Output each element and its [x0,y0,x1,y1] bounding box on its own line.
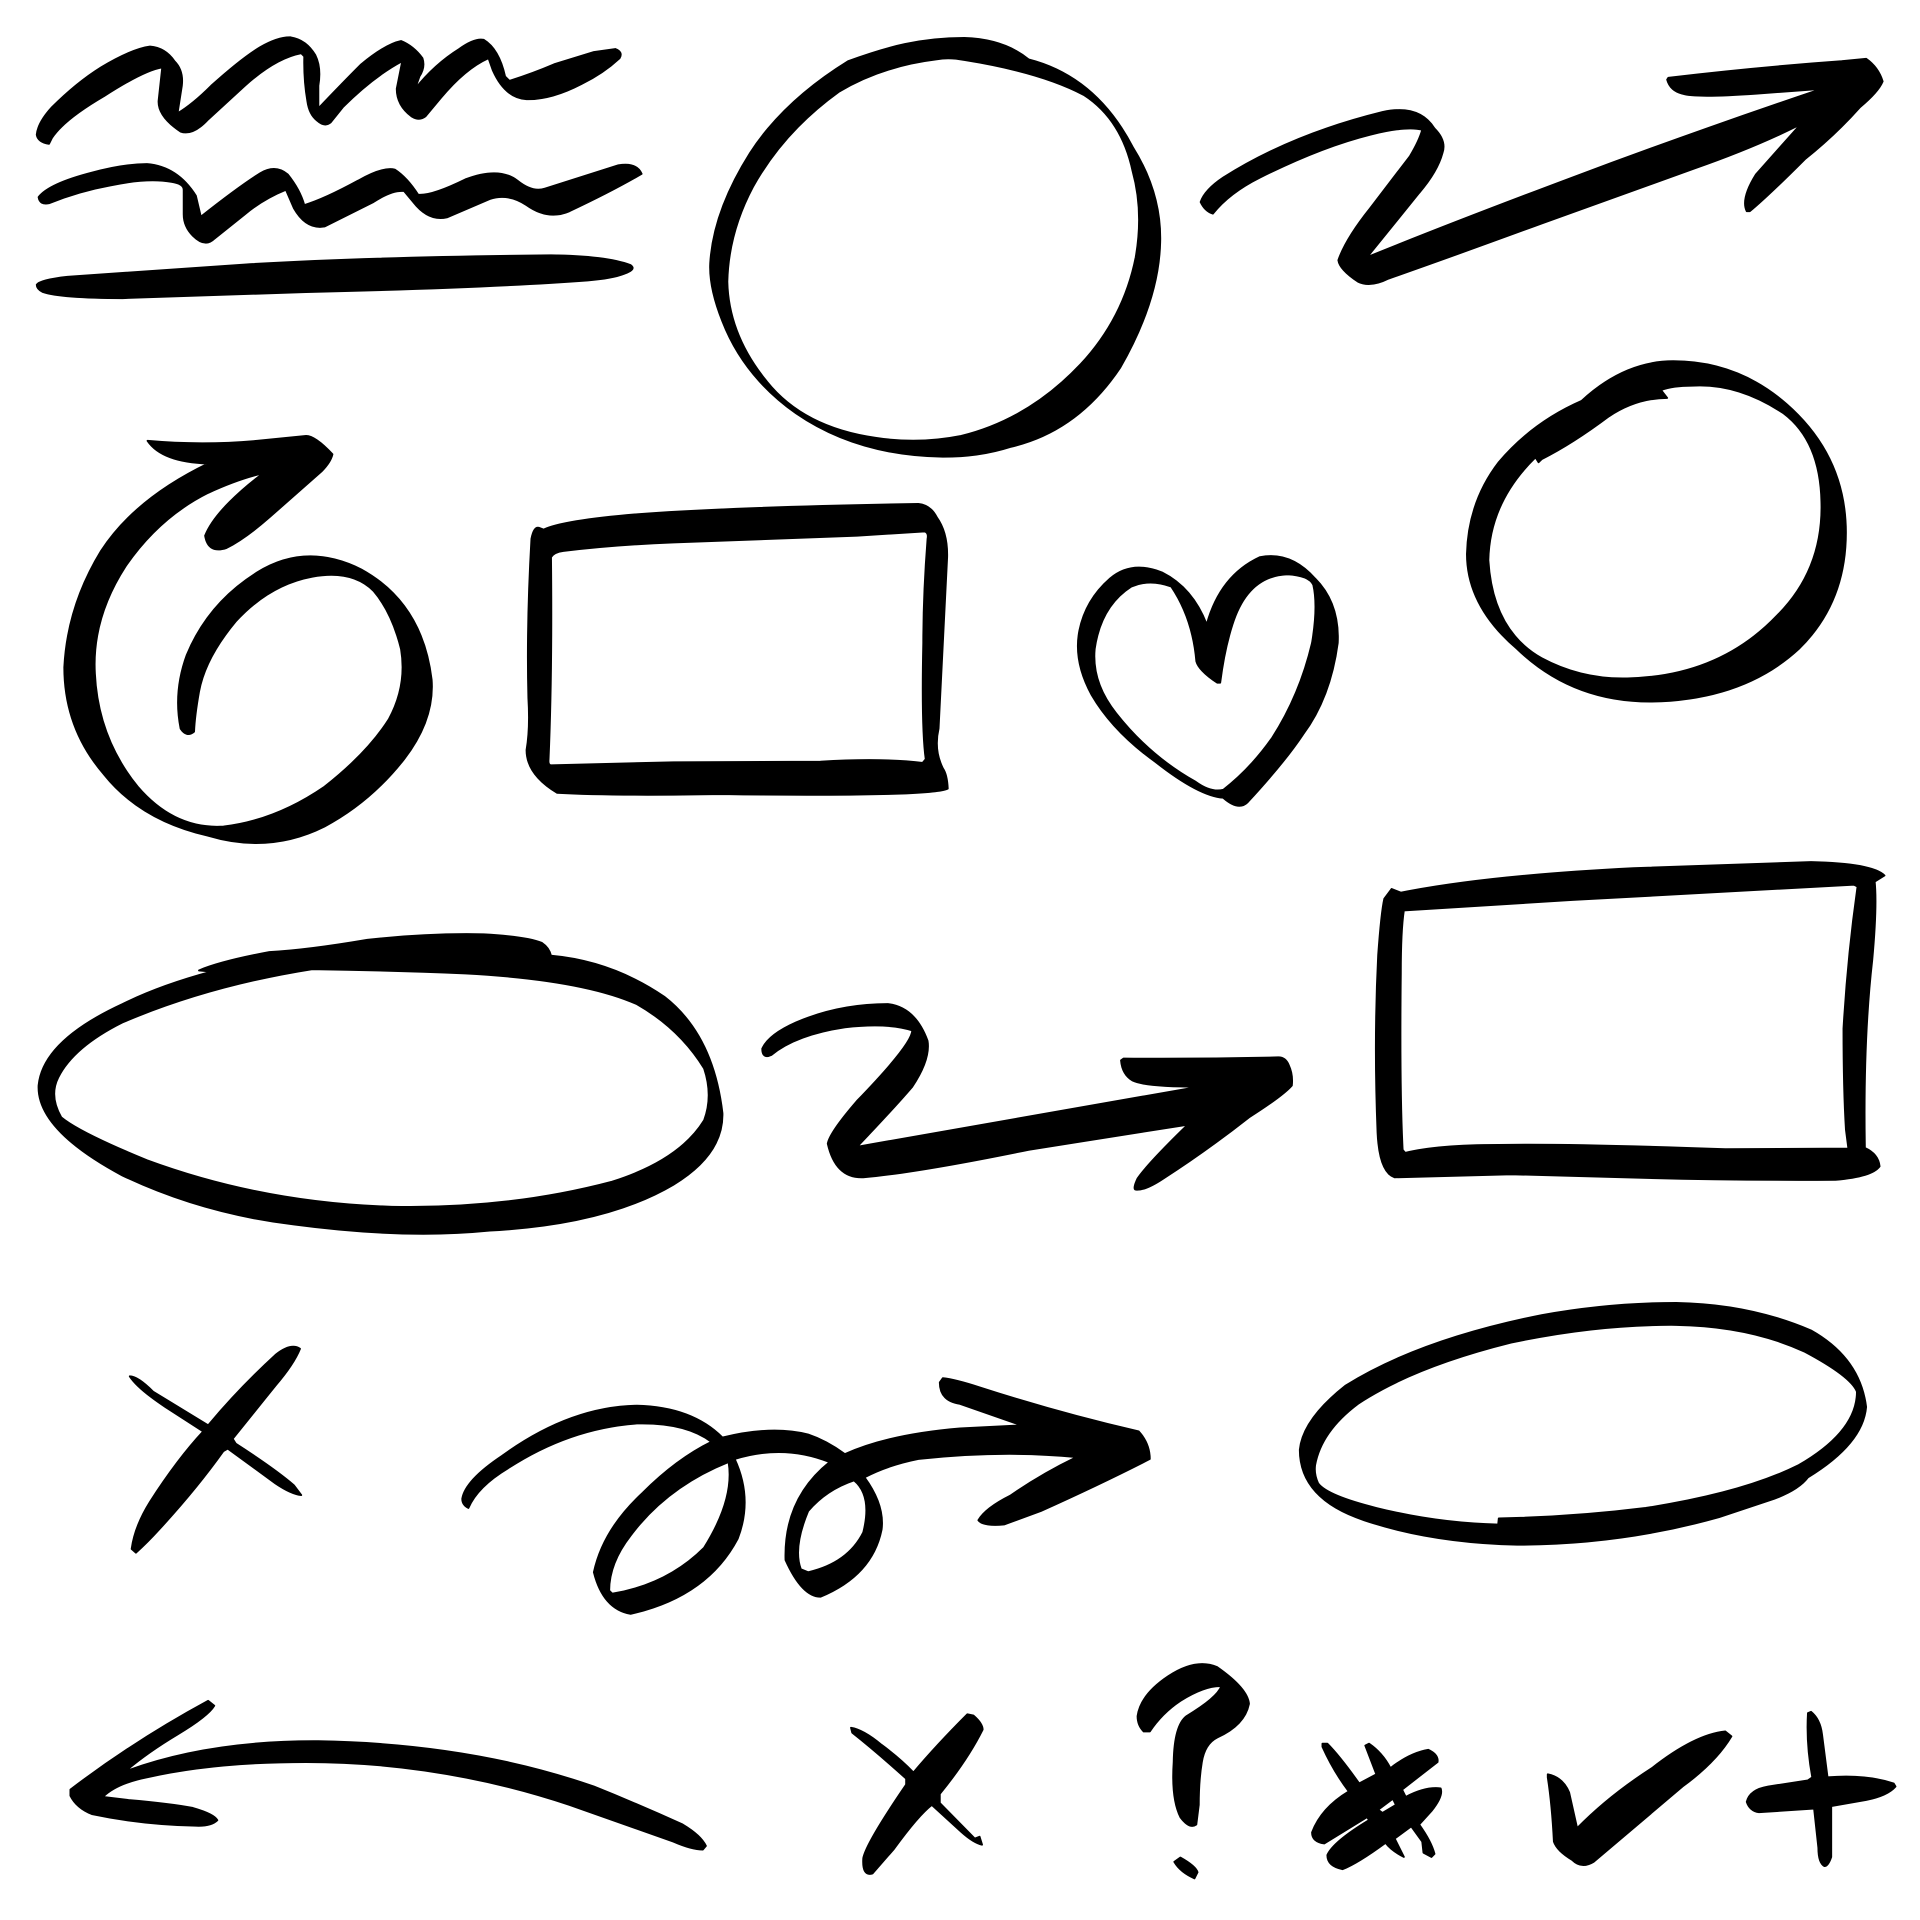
icon: plus [1747,1712,1896,1866]
squiggle underline 1 [37,37,621,144]
arrow: spiral [64,436,432,843]
icon: hash doodle [1312,1744,1441,1869]
icon: cross bottom [851,1714,983,1874]
circle right [1467,361,1846,702]
icon: cross left [130,1347,301,1553]
rectangle frame 2 [1376,862,1884,1180]
arrow: pointing left [70,1701,706,1850]
icon: heart [1078,556,1338,806]
large circle [710,38,1160,457]
icon: question mark doodle [1138,1664,1249,1878]
large oval left [39,934,722,1234]
arrow: middle zigzag [762,1004,1292,1190]
icon: check mark [1548,1731,1731,1865]
rectangle frame 1 [527,504,948,795]
straight brush stroke [37,255,633,298]
oval bottom right [1300,1303,1866,1545]
arrow: top right zigzag [1201,59,1883,284]
squiggle underline 2 [39,164,642,243]
arrow: double loop [462,1378,1150,1614]
